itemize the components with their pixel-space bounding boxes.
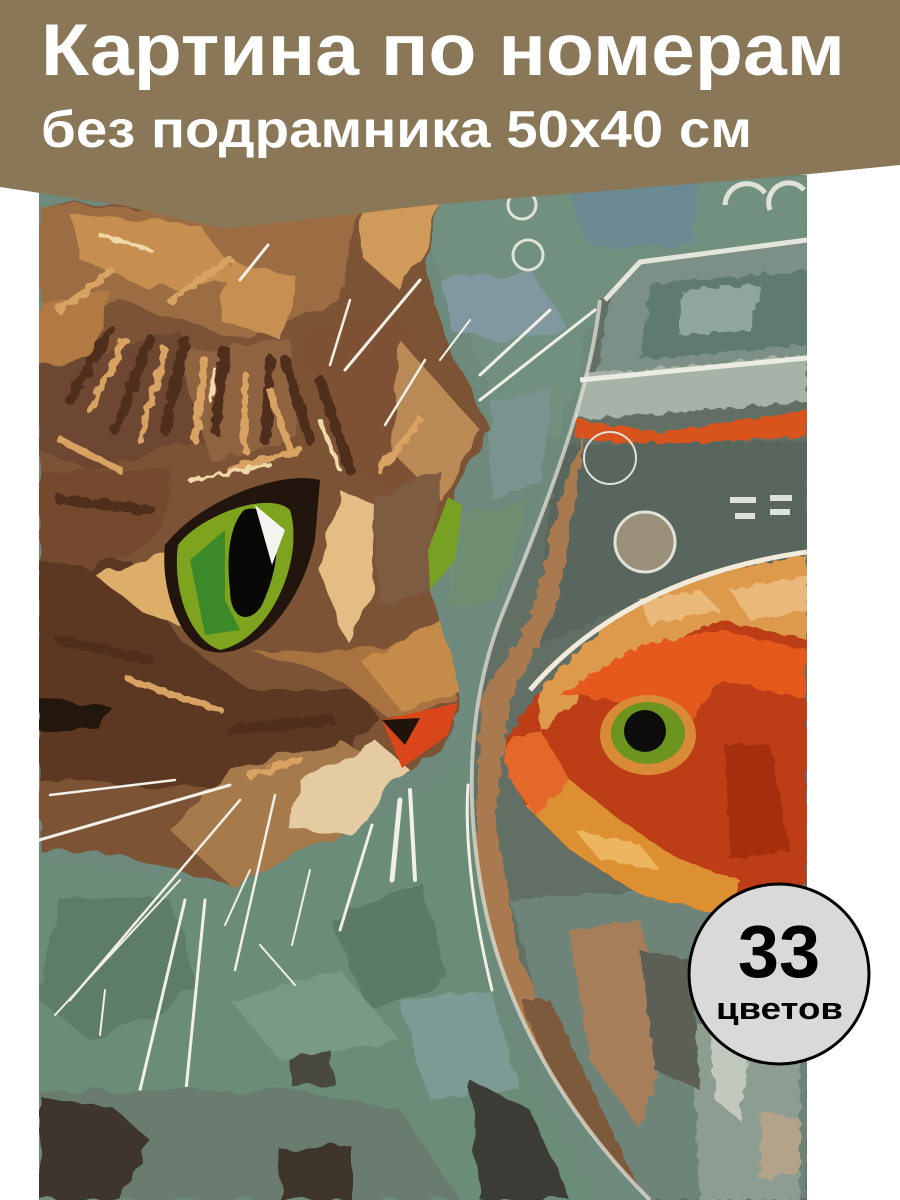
bowl glass edge: [472, 300, 650, 1200]
fish back highlight: [530, 552, 807, 690]
fish: [503, 555, 807, 915]
cat head: [39, 200, 490, 885]
title line 1: Картина по номерам: [41, 10, 845, 91]
bottom rock: [39, 1050, 570, 1200]
icon: cat eye: [164, 478, 320, 652]
whiskers: [39, 245, 595, 1100]
bubbles: [508, 183, 804, 572]
badge number: 33: [738, 910, 820, 993]
icon: cat far eye: [428, 497, 462, 590]
badge: 33 colours: [689, 884, 869, 1064]
title banner: [0, 0, 900, 229]
title line 2: без подрамника 50х40 см: [41, 101, 752, 159]
cat fur strokes: [60, 235, 420, 775]
background patches: [39, 183, 699, 1100]
bowl interior: [460, 240, 810, 1200]
icon: fish eye: [600, 695, 696, 775]
painting: cat and goldfish: [39, 175, 810, 1200]
icon: cat nose: [382, 703, 458, 768]
badge label: цветов: [716, 991, 843, 1026]
